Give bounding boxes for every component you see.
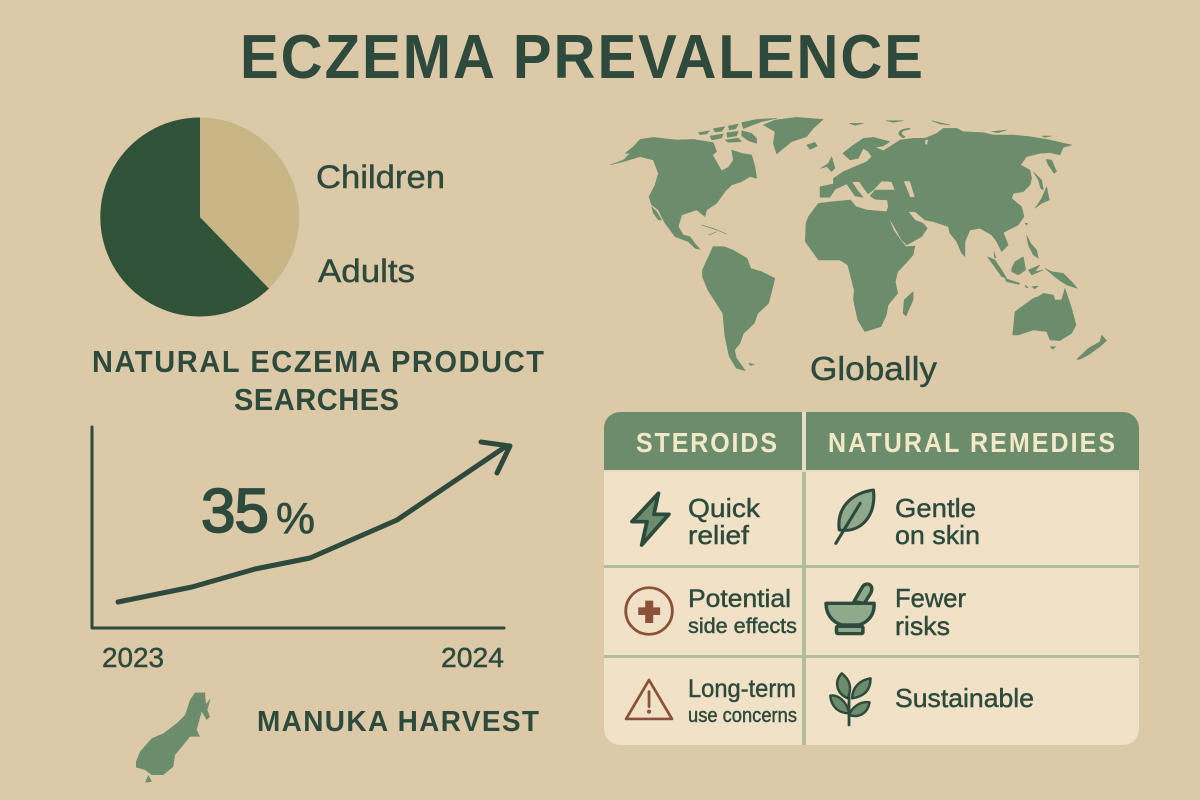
pie chart: children vs adults xyxy=(100,117,299,316)
table header: steroids: STEROIDS xyxy=(636,427,777,458)
text: sustainable: Sustainable xyxy=(895,683,1034,713)
text: fewer risks: risks xyxy=(895,611,950,641)
heading: natural eczema product searches: NATURAL ECZEMA PRODUCT xyxy=(92,345,544,379)
text: quick relief: Quick xyxy=(688,493,761,523)
title: ECZEMA PREVALENCE xyxy=(240,22,923,91)
text: gentle on skin: Gentle xyxy=(895,493,976,523)
text: long-term use concerns xyxy=(688,675,797,727)
text: gentle on skin: on skin xyxy=(895,520,980,550)
chart value: 35% xyxy=(201,477,315,546)
pie label: children: Children xyxy=(316,159,445,195)
comparison table xyxy=(604,412,1139,745)
label: manuka harvest: MANUKA HARVEST xyxy=(257,706,540,738)
icon: lightning bolt xyxy=(632,493,669,545)
icon: mortar and pestle xyxy=(826,584,874,634)
text: potential side effects: side effects xyxy=(688,615,797,638)
world map xyxy=(610,117,1107,371)
chart value: 35%: 35 xyxy=(201,477,269,546)
map: north america and greenland xyxy=(610,117,823,249)
text: potential side effects: Potential xyxy=(688,585,791,613)
axis label: 2024: 2024 xyxy=(441,642,504,673)
axis label: 2023: 2023 xyxy=(102,642,164,673)
text: quick relief xyxy=(688,493,761,550)
map: eurasia xyxy=(807,121,1072,257)
table header: natural remedies: NATURAL REMEDIES xyxy=(828,427,1115,458)
map: africa and south america xyxy=(702,200,915,371)
text: quick relief: relief xyxy=(688,520,750,550)
map: southeast asia and oceania xyxy=(987,235,1107,359)
icon: new zealand south island xyxy=(136,693,211,783)
text: long-term use concerns: use concerns xyxy=(688,705,797,727)
icon: leaf xyxy=(836,490,874,543)
pie label: adults: Adults xyxy=(318,253,415,289)
text: potential side effects xyxy=(688,585,797,638)
heading: natural eczema product searches xyxy=(92,345,544,417)
heading: natural eczema product searches: SEARCHES xyxy=(234,383,399,417)
icon: sprout xyxy=(830,673,871,725)
text: fewer risks: Fewer xyxy=(895,583,966,613)
text: long-term use concerns: Long-term xyxy=(688,675,796,703)
text: fewer risks xyxy=(895,583,966,641)
icon: medical cross circle xyxy=(626,588,672,634)
icon: warning triangle xyxy=(626,680,672,719)
line chart: searches 2023 to 2024 xyxy=(92,427,510,628)
map label: globally: Globally xyxy=(810,350,938,387)
chart value: 35%: % xyxy=(276,494,315,543)
text: gentle on skin xyxy=(895,493,980,550)
